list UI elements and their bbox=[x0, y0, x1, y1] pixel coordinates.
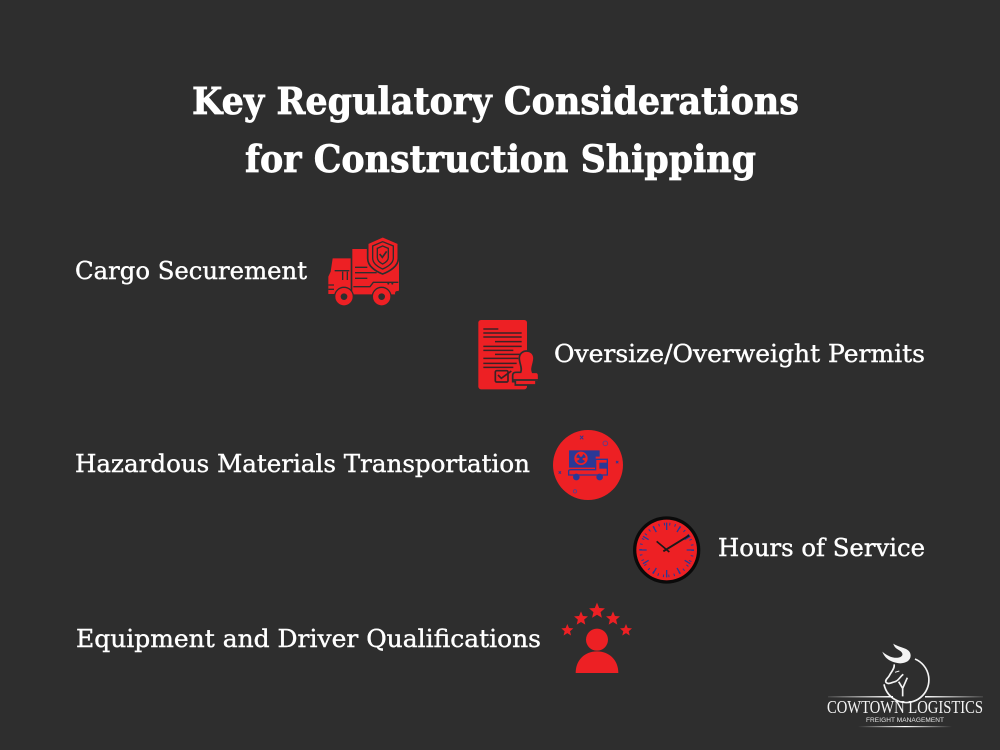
logo: tagline: FREIGHT MANAGEMENT bbox=[866, 717, 944, 724]
icon: truck with shield bbox=[328, 237, 400, 306]
icon: hazmat truck bbox=[553, 430, 623, 500]
logo: rule right bbox=[925, 696, 983, 698]
label: equipment and driver qualifications: Equipment and Driver Qualifications bbox=[76, 624, 541, 653]
logo: Cowtown Logistics bbox=[827, 644, 983, 727]
logo: underline bbox=[858, 726, 952, 727]
label: oversize/overweight permits: Oversize/Overweight Permits bbox=[554, 339, 925, 368]
label: cargo securement: Cargo Securement bbox=[75, 256, 307, 285]
label: hazardous materials transportation: Hazardous Materials Transportation bbox=[75, 449, 530, 478]
label: hours of service: Hours of Service bbox=[718, 533, 925, 562]
logo: bull emblem bbox=[882, 644, 929, 703]
title: Key Regulatory Considerations bbox=[192, 79, 799, 123]
logo: rule left bbox=[828, 696, 893, 698]
icon: permit document with stamp bbox=[478, 320, 539, 389]
icon: person with five stars bbox=[561, 603, 632, 673]
title: for Construction Shipping bbox=[245, 137, 756, 181]
icon: clock bbox=[633, 516, 700, 584]
title bbox=[192, 79, 799, 181]
